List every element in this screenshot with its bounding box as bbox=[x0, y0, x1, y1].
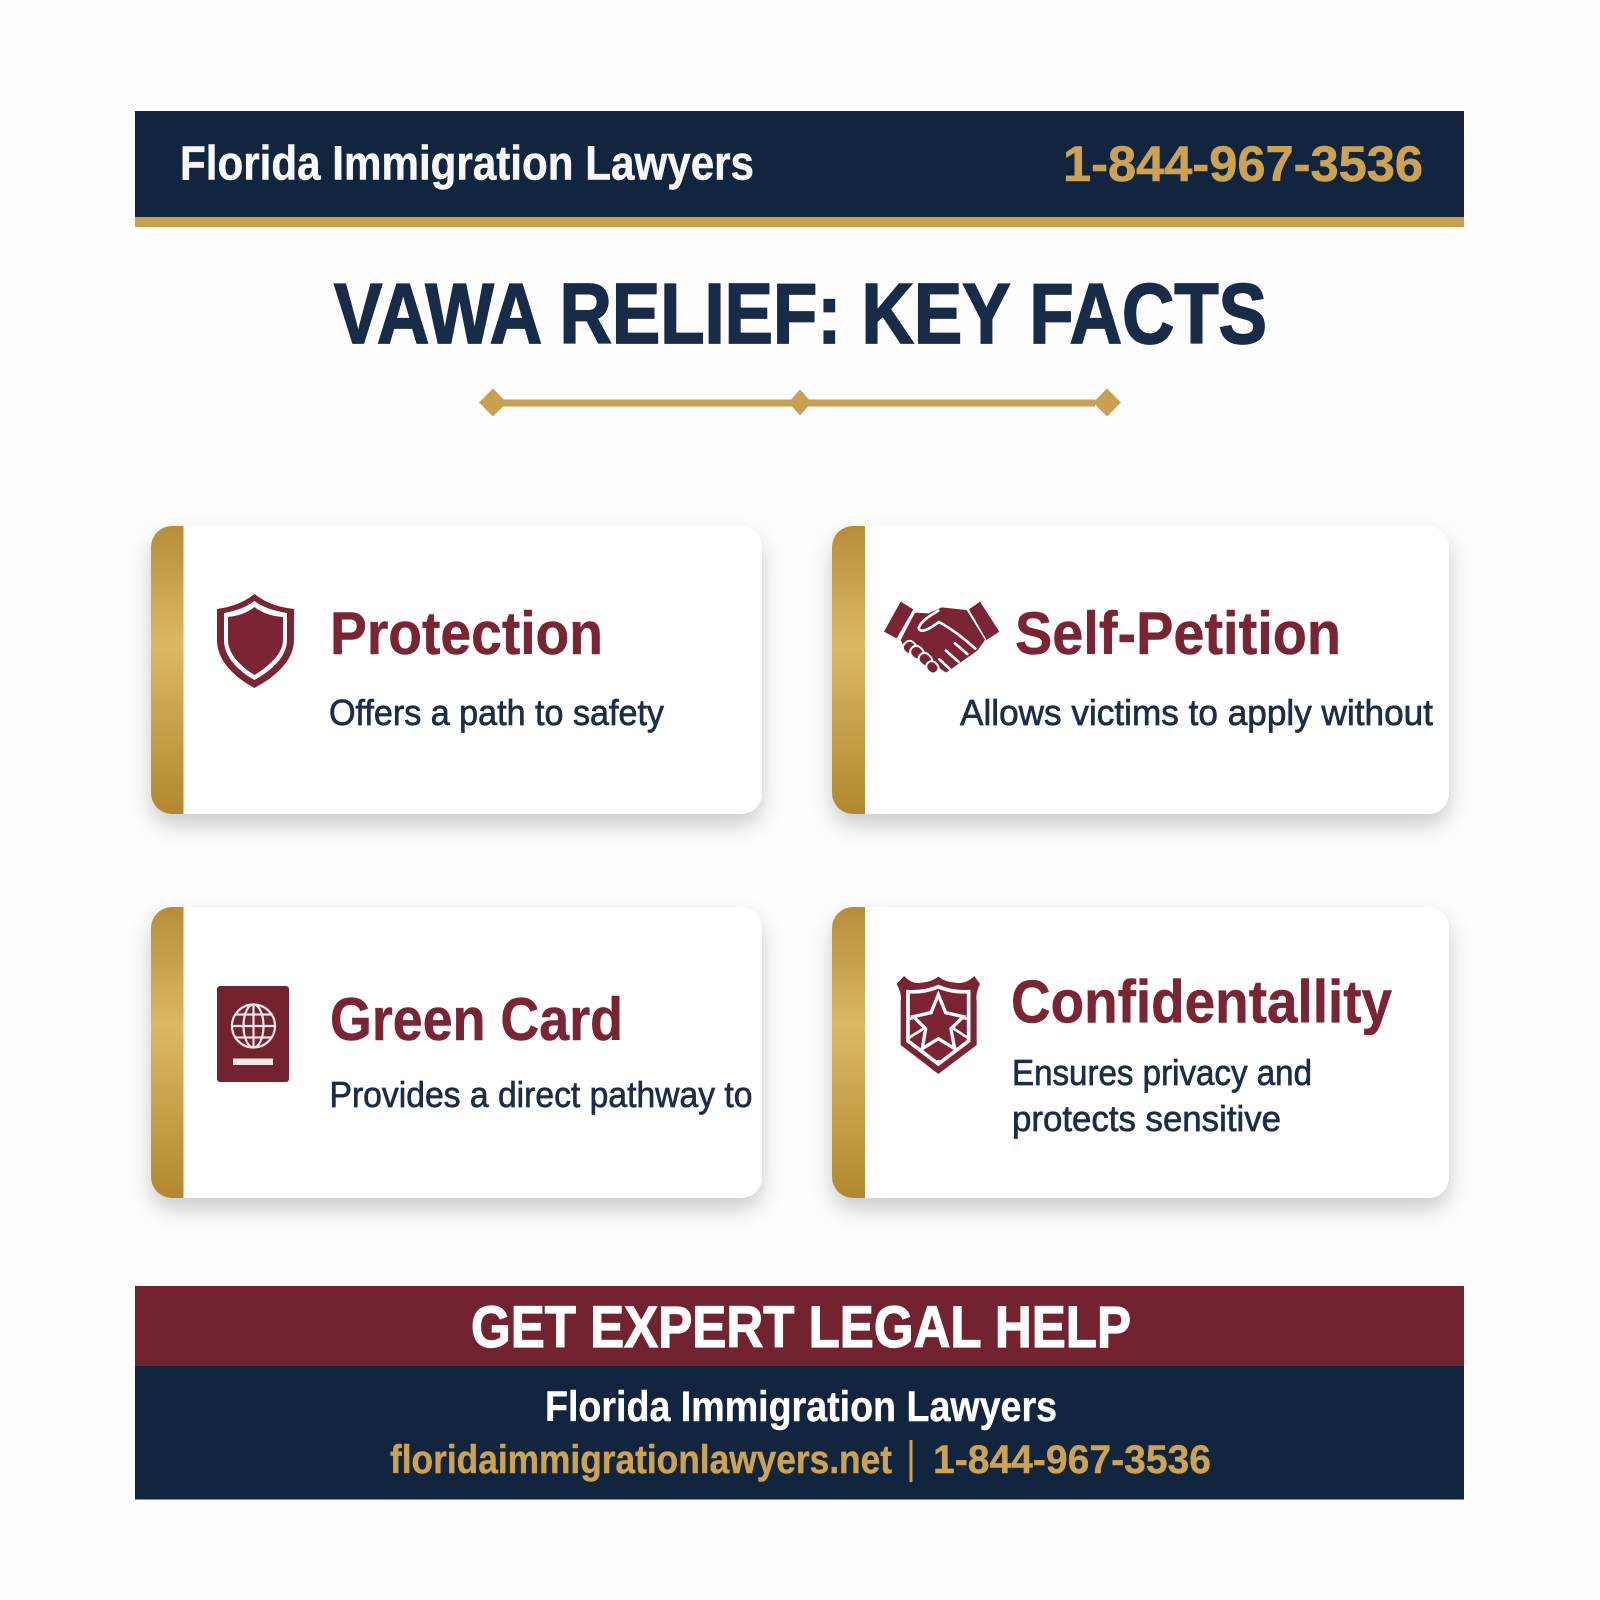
panel: protection bbox=[151, 526, 762, 814]
description: protection: Offers a path to safety bbox=[329, 692, 665, 733]
description: green card: Provides a direct pathway to bbox=[330, 1074, 752, 1115]
panel: self-petition bbox=[832, 526, 1449, 814]
panel: green card bbox=[151, 907, 762, 1198]
header phone number: 1-844-967-3536 bbox=[1063, 135, 1423, 192]
icon: badge with star bbox=[897, 976, 980, 1074]
title: VAWA RELIEF: KEY FACTS bbox=[334, 267, 1267, 362]
description: confidentiality bbox=[1012, 1052, 1312, 1139]
footer website: floridaimmigrationlawyers.net bbox=[390, 1438, 892, 1482]
heading: green card: Green Card bbox=[330, 986, 623, 1053]
heading: protection: Protection bbox=[330, 600, 603, 667]
footer firm name: Florida Immigration Lawyers bbox=[545, 1383, 1057, 1431]
header bar bbox=[135, 111, 1464, 227]
footer contact block bbox=[135, 1366, 1464, 1500]
icon: passport bbox=[217, 986, 289, 1082]
footer call to action banner bbox=[135, 1286, 1464, 1366]
panel: confidentiality bbox=[832, 907, 1449, 1198]
heading: confidentiality: Confidentallity bbox=[1011, 968, 1393, 1036]
footer phone number: 1-844-967-3536 bbox=[933, 1438, 1211, 1482]
heading: self-petition: Self-Petition bbox=[1015, 600, 1341, 667]
description: confidentiality: protects sensitive bbox=[1012, 1098, 1281, 1139]
icon: shield bbox=[217, 594, 294, 688]
icon: handshake bbox=[884, 602, 999, 676]
footer headline: GET EXPERT LEGAL HELP bbox=[471, 1295, 1131, 1360]
description: confidentiality: Ensures privacy and bbox=[1012, 1052, 1312, 1093]
header firm name: Florida Immigration Lawyers bbox=[180, 136, 754, 190]
title divider bbox=[479, 388, 1121, 416]
description: self-petition: Allows victims to apply without bbox=[960, 692, 1433, 733]
